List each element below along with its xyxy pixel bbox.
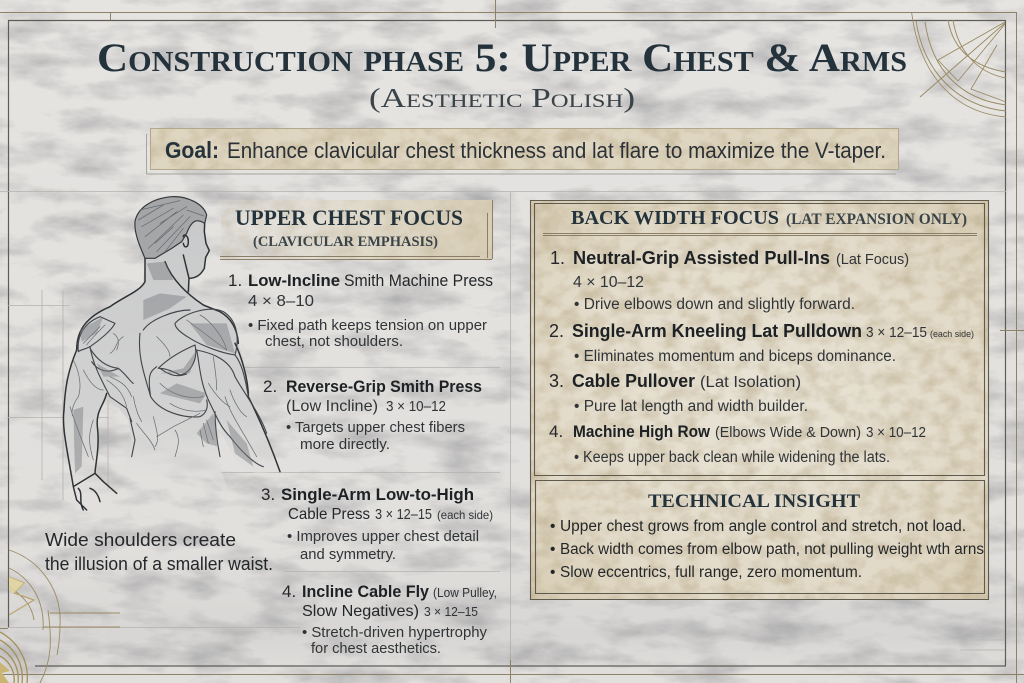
exercise 3: • Improves upper chest detail bbox=[287, 528, 479, 545]
heading: back width focus: BACK WIDTH FOCUS bbox=[571, 207, 779, 229]
exercise 4: (Low Pulley, bbox=[433, 586, 497, 600]
hair bbox=[135, 197, 207, 258]
body outlines bbox=[63, 223, 280, 510]
back exercise 4: Machine High Row bbox=[573, 422, 711, 441]
heading: back width focus bbox=[543, 207, 977, 236]
exercise 4: 3 × 12–15 bbox=[424, 604, 478, 619]
exercise 2: • Targets upper chest fibers bbox=[286, 419, 465, 436]
exercise 4: for chest aesthetics. bbox=[311, 640, 441, 657]
exercise 1: 1. bbox=[228, 271, 242, 290]
panel: upper chest focus bbox=[220, 200, 497, 657]
exercise 1 bbox=[228, 271, 493, 350]
goal banner bbox=[146, 128, 899, 174]
back exercise 1: • Drive elbows down and slightly forward. bbox=[574, 296, 855, 313]
exercise 2: Reverse-Grip Smith Press bbox=[286, 377, 482, 396]
exercise 2: 3 × 10–12 bbox=[386, 398, 446, 415]
compass ornament: top right bbox=[912, 13, 1006, 117]
caption: wide shoulders: Wide shoulders create bbox=[45, 530, 236, 550]
exercise 2: 2. bbox=[263, 377, 277, 396]
back exercise 2: Single-Arm Kneeling Lat Pulldown bbox=[572, 321, 862, 341]
panel: technical insight: TECHNICAL INSIGHT bbox=[648, 491, 860, 512]
exercise 4: Slow Negatives) bbox=[302, 603, 419, 620]
heading: upper chest focus bbox=[220, 200, 492, 260]
exercise 4: 4. bbox=[282, 582, 296, 601]
back exercise 3 bbox=[549, 371, 808, 415]
heading: back width focus: (LAT EXPANSION ONLY) bbox=[786, 211, 967, 228]
back exercise 2 bbox=[549, 321, 974, 365]
illustration: muscular back figure bbox=[63, 197, 280, 510]
panel: technical insight: Back width comes from elbow path, not pulling weight wth arns bbox=[560, 541, 984, 558]
subtitle: (Aesthetic Polish) bbox=[369, 83, 635, 113]
hair strands bbox=[138, 201, 204, 252]
heading: upper chest focus: UPPER CHEST FOCUS bbox=[235, 205, 463, 230]
back exercise 2: (each side) bbox=[930, 329, 974, 340]
panel: technical insight: • bbox=[550, 564, 555, 581]
exercise 4: Incline Cable Fly bbox=[302, 582, 430, 601]
exercise 3: Single-Arm Low-to-High bbox=[281, 485, 474, 504]
exercise 3 bbox=[261, 485, 493, 563]
back exercise 1: Neutral-Grip Assisted Pull-Ins bbox=[573, 248, 830, 268]
exercise 2: (Low Incline) bbox=[286, 398, 378, 415]
panel: technical insight: • bbox=[550, 518, 555, 535]
back exercise 3: Cable Pullover bbox=[572, 371, 695, 391]
exercise 3: Cable Press bbox=[288, 506, 370, 523]
back exercise 3: (Lat Isolation) bbox=[700, 374, 801, 391]
back exercise 2: 2. bbox=[549, 321, 564, 341]
panel: technical insight: • bbox=[550, 541, 555, 558]
exercise 1: Low-Incline bbox=[248, 271, 340, 290]
shading bbox=[73, 262, 253, 473]
exercise 1: • Fixed path keeps tension on upper bbox=[248, 317, 487, 334]
panel: technical insight: Slow eccentrics, full range, zero momentum. bbox=[560, 564, 862, 581]
back exercise 4 bbox=[549, 422, 926, 466]
exercise 3: 3 × 12–15 bbox=[375, 507, 432, 523]
back exercise 1: (Lat Focus) bbox=[836, 251, 909, 268]
back exercise 4: 3 × 10–12 bbox=[866, 424, 926, 441]
exercise 1: chest, not shoulders. bbox=[265, 333, 403, 350]
panel: right column card bbox=[530, 200, 989, 600]
exercise 1: 4 × 8–10 bbox=[248, 293, 314, 310]
compass ornament: bottom left bbox=[0, 550, 120, 683]
heading: upper chest focus: (CLAVICULAR EMPHASIS) bbox=[253, 234, 438, 250]
exercise 3: and symmetry. bbox=[300, 546, 396, 563]
exercise 4 bbox=[282, 582, 497, 657]
exercise 3: (each side) bbox=[437, 508, 493, 522]
title: Construction phase 5: Upper Chest & Arms bbox=[97, 35, 907, 80]
exercise 2 bbox=[263, 377, 482, 453]
back exercise 3: 3. bbox=[549, 371, 564, 391]
exercise 2: more directly. bbox=[300, 436, 390, 453]
exercise 1: Smith Machine Press bbox=[344, 271, 493, 290]
back muscle lines bbox=[70, 309, 267, 467]
caption: wide shoulders bbox=[45, 530, 273, 574]
back exercise 4: • Keeps upper back clean while widening the lats. bbox=[574, 449, 890, 466]
back exercise 1: 1. bbox=[550, 248, 565, 268]
caption: wide shoulders: the illusion of a smaller waist. bbox=[45, 554, 273, 574]
back exercise 2: • Eliminates momentum and biceps dominance. bbox=[574, 348, 896, 365]
back exercise 2: 3 × 12–15 bbox=[866, 324, 927, 341]
goal banner: Enhance clavicular chest thickness and lat flare to maximize the V-taper. bbox=[227, 138, 886, 163]
back exercise 1: 4 × 10–12 bbox=[573, 274, 644, 291]
back exercise 4: 4. bbox=[549, 422, 563, 441]
goal banner: Goal: bbox=[165, 137, 219, 163]
panel: technical insight bbox=[550, 491, 984, 581]
exercise 3: 3. bbox=[261, 485, 275, 504]
panel: technical insight: Upper chest grows from angle control and stretch, not load. bbox=[560, 518, 966, 535]
back exercise 1 bbox=[550, 248, 909, 313]
back exercise 3: • Pure lat length and width builder. bbox=[574, 398, 808, 415]
exercise 4: • Stretch-driven hypertrophy bbox=[302, 624, 487, 641]
back exercise 4: (Elbows Wide & Down) bbox=[715, 425, 861, 441]
